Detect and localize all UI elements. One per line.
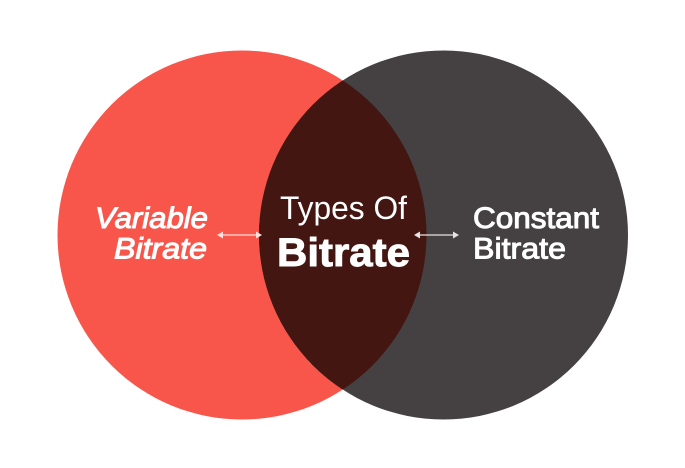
label: constant bitrate (473, 202, 600, 266)
label: variable bitrate (95, 202, 208, 266)
arrow: left double-headed (217, 232, 262, 238)
label: variable bitrate: Variable (95, 202, 208, 235)
heading: types of bitrate: Types Of (280, 190, 407, 226)
label: constant bitrate: Constant (473, 202, 600, 235)
heading: types of bitrate: Bitrate (277, 231, 410, 275)
label: variable bitrate: Bitrate (114, 232, 207, 266)
arrow: right double-headed (414, 232, 459, 238)
circle: variable bitrate (58, 50, 426, 420)
circle overlap (259, 80, 426, 390)
circle: constant bitrate (259, 50, 628, 420)
label: constant bitrate: Bitrate (473, 232, 566, 266)
venn diagram (58, 50, 628, 420)
heading: types of bitrate (277, 190, 410, 275)
